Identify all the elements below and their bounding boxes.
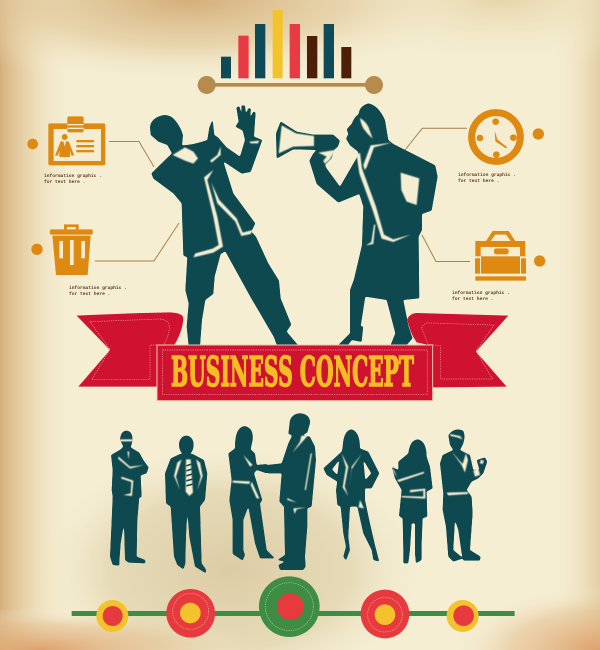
- man: jacket lapel: [193, 170, 223, 257]
- woman: pocket line: [366, 225, 375, 245]
- icon: clock: [472, 113, 544, 161]
- megaphone: handle gap: [318, 150, 335, 164]
- figure: woman with megaphone: [276, 103, 438, 347]
- person: woman shaking hands: [228, 426, 275, 561]
- woman: collar edge: [363, 143, 392, 170]
- woman: jacket edge: [357, 153, 411, 242]
- caption: id badge: information graphic .: [44, 173, 102, 179]
- woman: elbow gap: [401, 173, 419, 205]
- circle: small right: [447, 600, 479, 632]
- caption: clock: for text here .: [458, 178, 499, 184]
- connector lines: [95, 128, 470, 262]
- caption: briefcase: for text here .: [452, 296, 493, 302]
- caption: clock: information graphic .: [458, 172, 516, 178]
- banner panel: [157, 345, 433, 401]
- caption: briefcase: information graphic .: [452, 290, 510, 296]
- person: man hands in pockets: [165, 436, 207, 573]
- caption: trash can: for text here .: [69, 291, 110, 297]
- megaphone: bell highlight: [279, 125, 314, 153]
- timeline with circles: [72, 576, 515, 638]
- caption: trash can: information graphic .: [69, 285, 127, 291]
- icon: id badge: [27, 116, 105, 165]
- ribbon: right tail: [407, 313, 508, 387]
- bar chart: [198, 10, 383, 94]
- icon: briefcase: [475, 231, 545, 281]
- man: sleeve cuff: [210, 141, 259, 163]
- person: man arms crossed: [110, 431, 149, 566]
- caption: id badge: for text here .: [44, 179, 85, 185]
- icon: trash can: [31, 224, 93, 275]
- group of business people: [110, 413, 487, 573]
- person: man shaking hands: [263, 413, 316, 570]
- circle: medium left: [166, 589, 215, 638]
- circle: large center: [259, 576, 320, 637]
- figure: man recoiling: [150, 105, 299, 347]
- person: man with phone: [440, 429, 487, 562]
- person: woman hands on hips: [323, 429, 379, 562]
- circle: medium right: [361, 590, 409, 638]
- person: woman with folder: [392, 439, 433, 563]
- woman: hair highlight: [360, 118, 373, 139]
- man: collar: [173, 147, 198, 164]
- circle: small left: [96, 600, 128, 632]
- man: jacket edge: [211, 183, 253, 236]
- ribbon: left tail: [77, 312, 183, 387]
